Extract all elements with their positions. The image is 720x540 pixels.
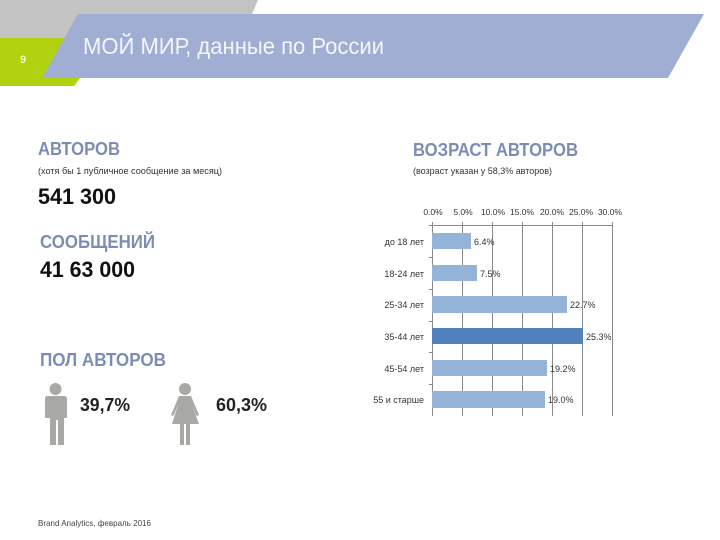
authors note: (хотя бы 1 публичное сообщение за месяц) (38, 166, 222, 176)
female share: 60,3% (216, 395, 267, 415)
messages number: 41 63 000 (40, 257, 135, 282)
category labels: 35-44 лет (384, 332, 424, 342)
age heading: ВОЗРАСТ АВТОРОВ (413, 140, 578, 160)
category labels: 25-34 лет (384, 300, 424, 310)
value labels: 6.4% (474, 237, 495, 247)
value labels: 25.3% (586, 332, 612, 342)
grey corner shape (0, 0, 258, 38)
page number: 9 (20, 54, 26, 66)
messages heading: СООБЩЕНИЙ (40, 231, 155, 252)
value labels: 19.0% (548, 395, 574, 405)
category labels: 55 и старше (373, 395, 424, 405)
category labels (373, 237, 424, 405)
axis labels: 30.0% (598, 207, 622, 217)
authors number: 541 300 (38, 184, 116, 209)
category labels: 18-24 лет (384, 269, 424, 279)
grid lines (429, 222, 613, 416)
header band (0, 0, 704, 86)
icon: female figure (171, 383, 199, 445)
bar chart: authors by age (373, 207, 622, 416)
category labels: 45-54 лет (384, 364, 424, 374)
title: МОЙ МИР, данные по России (83, 32, 384, 59)
source note: Brand Analytics, февраль 2016 (38, 518, 151, 528)
blue title banner (42, 14, 704, 78)
axis labels: 5.0% (453, 207, 473, 217)
axis labels: 10.0% (481, 207, 505, 217)
authors heading: АВТОРОВ (38, 139, 120, 159)
green page number tab (0, 38, 90, 86)
axis labels: 25.0% (569, 207, 593, 217)
value labels: 22.7% (570, 300, 596, 310)
value labels: 7.5% (480, 269, 501, 279)
male share: 39,7% (80, 395, 130, 415)
axis labels: 20.0% (540, 207, 564, 217)
age note: (возраст указан у 58,3% авторов) (413, 166, 552, 176)
axis labels: 15.0% (510, 207, 534, 217)
value labels: 19.2% (550, 364, 576, 374)
gender heading: ПОЛ АВТОРОВ (40, 350, 166, 370)
icon: male figure (45, 383, 67, 445)
value labels (474, 237, 612, 405)
axis labels: 0.0% (423, 207, 443, 217)
axis labels (423, 207, 622, 217)
bars (432, 233, 583, 408)
category labels: до 18 лет (385, 237, 424, 247)
